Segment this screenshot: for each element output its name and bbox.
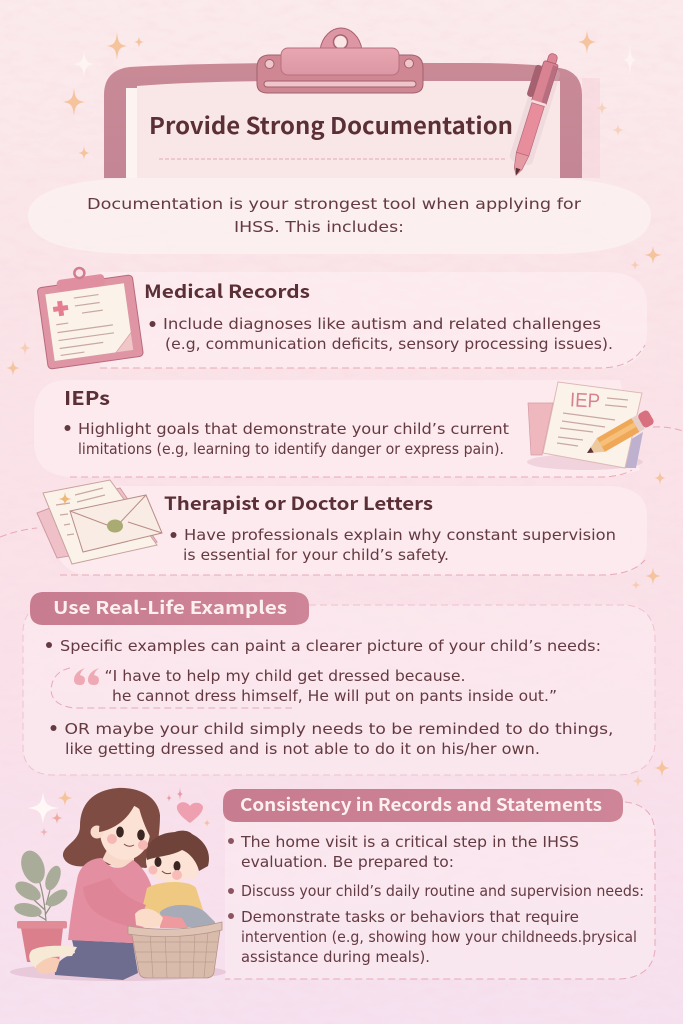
child <box>143 831 215 928</box>
panel: use real-life examples <box>23 592 655 775</box>
clipboard paper <box>126 81 560 178</box>
icon: IEP document and pencil: IEP <box>569 389 601 413</box>
banner: Consistency in Records and Statements <box>240 792 602 817</box>
icon: quote mark <box>74 668 99 685</box>
banner <box>223 789 623 822</box>
dashed rule <box>159 158 505 160</box>
pen <box>503 50 565 179</box>
mother's arm <box>83 878 163 928</box>
intro pill <box>28 178 651 254</box>
quote callout: “I have to help my child get dressed because. <box>104 667 465 685</box>
bullet text: (e.g, communication deficits, sensory processing issues). <box>165 335 613 353</box>
intro text: Documentation is your strongest tool when applying for <box>87 195 582 213</box>
intro text <box>87 195 582 236</box>
bullet text: Highlight goals that demonstrate your child’s current <box>78 420 509 438</box>
quote callout <box>51 667 557 708</box>
clipboard frame <box>104 63 582 178</box>
bullet text: limitations (e.g, learning to identify danger or express pain). <box>78 440 504 458</box>
sparkles and heart <box>27 787 211 837</box>
heading: Medical Records <box>144 278 310 304</box>
intro text: IHSS. This includes: <box>234 218 404 236</box>
banner <box>30 592 309 625</box>
decorative sparkles <box>6 30 670 787</box>
bullet text <box>228 833 579 871</box>
title: Provide Strong Documentation <box>149 107 513 141</box>
bullet text <box>64 420 509 458</box>
metal clip <box>257 28 423 93</box>
bullet text: intervention (e.g, showing how your childneeds.þrysical <box>241 928 637 946</box>
mother <box>29 788 160 980</box>
icon: letters and envelope <box>37 480 162 564</box>
bullet text: OR maybe your child simply needs to be reminded to do things, <box>64 720 614 738</box>
bullet text: Discuss your child’s daily routine and supervision needs: <box>241 882 644 900</box>
panel: consistency in records <box>223 789 655 979</box>
bullet text <box>150 315 613 353</box>
bullet text: Include diagnoses like autism and related challenges <box>163 315 601 333</box>
heading: IEPs <box>64 384 110 411</box>
bullet text: Demonstrate tasks or behaviors that require <box>241 908 579 926</box>
icon: IEP document and pencil <box>527 382 655 470</box>
bullet text: assistance during meals). <box>241 948 430 966</box>
panel: medical records <box>35 261 647 369</box>
quote callout: he cannot dress himself, He will put on pants inside out.” <box>112 687 557 705</box>
pencil <box>583 409 655 460</box>
bullet text: evaluation. Be prepared to: <box>241 853 454 871</box>
panel: therapist or doctor letters <box>0 480 647 575</box>
icon: medical clipboard <box>35 261 144 369</box>
bullet text: is essential for your child’s safety. <box>183 546 449 564</box>
bullet text <box>228 908 637 966</box>
banner: Use Real-Life Examples <box>53 595 287 620</box>
heading: Therapist or Doctor Letters <box>164 490 433 516</box>
bullet text: Specific examples can paint a clearer picture of your child’s needs: <box>60 637 601 655</box>
laundry basket <box>128 922 222 978</box>
illustration: mother and child with laundry basket <box>10 787 226 981</box>
bullet text: like getting dressed and is not able to do it on his/her own. <box>65 740 540 758</box>
bullet text <box>170 526 616 564</box>
panel: IEPs <box>34 380 683 477</box>
plant <box>12 847 70 962</box>
clipboard header <box>104 28 600 179</box>
bullet text <box>50 720 614 758</box>
bullet text: Have professionals explain why constant supervision <box>184 526 616 544</box>
bullet text: The home visit is a critical step in the IHSS <box>240 833 579 851</box>
